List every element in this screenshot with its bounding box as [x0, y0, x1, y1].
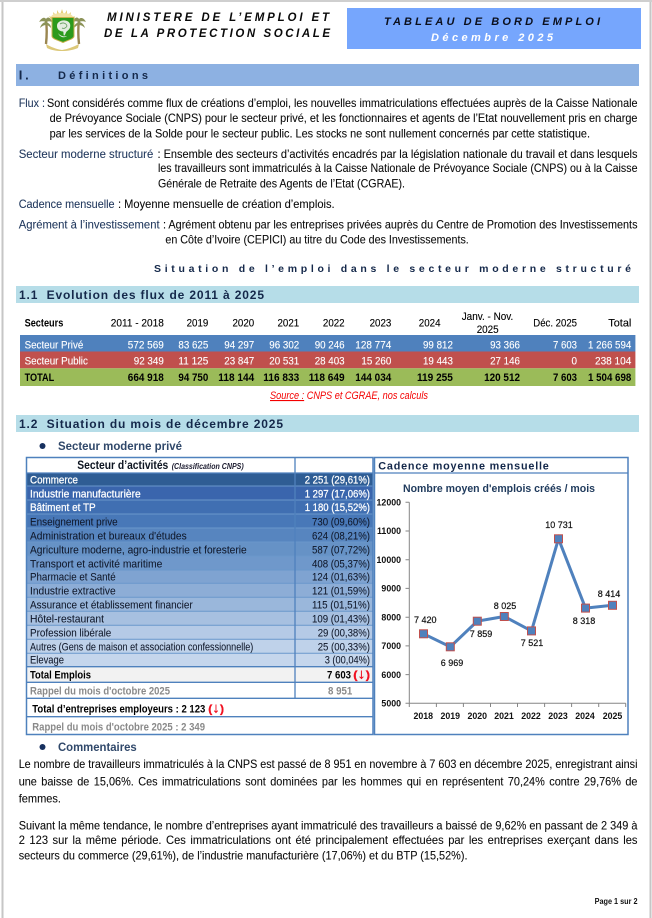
- row: total entreprises: (↓): [208, 700, 224, 716]
- subheading: commentaires: Commentaires: [58, 742, 137, 754]
- y axis labels: 6000: [381, 670, 401, 680]
- row: assurance: Assurance et établissement financier: [30, 599, 193, 611]
- row: industrie manufacturière: 1 297 (17,06%): [305, 488, 370, 500]
- table header: 2024: [419, 317, 441, 329]
- text block: definitions: : Ensemble des secteurs d’activités encadrés par la législation nationale du travail et dans lesquels: [158, 148, 638, 161]
- row: secteur public: 19 443: [423, 355, 453, 367]
- x axis labels: 2021: [494, 711, 514, 721]
- header: dashboard title box: [347, 8, 641, 49]
- data labels: 8 025: [494, 601, 516, 611]
- row: secteur privé: 1 266 594: [588, 339, 631, 351]
- row: agriculture: [30, 544, 370, 556]
- x axis labels: 2024: [575, 711, 595, 721]
- row: secteur privé: 128 774: [355, 339, 391, 351]
- row: assurance: 115 (01,51%): [312, 599, 370, 611]
- row: pharmacie: [30, 571, 370, 583]
- table header: Déc. 2025: [533, 317, 577, 329]
- text block: commentaires: 2 123 sur la même période. Ces immatriculations ont été principalement effectuées par les entreprises exerçant dans les: [19, 834, 638, 847]
- row: total: 118 649: [309, 372, 345, 384]
- row: rappel entreprises: Rappel du mois d'octobre 2025 : 2 349: [32, 721, 205, 733]
- row: agriculture: 587 (07,72%): [312, 544, 370, 556]
- panel heading: Cadence moyenne mensuelle: [378, 460, 549, 472]
- data markers: [420, 535, 616, 651]
- row: secteur privé: 7 603: [553, 339, 577, 351]
- text block: definitions: Flux :: [19, 97, 45, 110]
- data labels: [414, 520, 620, 668]
- table column header: (Classification CNPS): [172, 462, 244, 471]
- row: bâtiment: Bâtiment et TP: [30, 502, 96, 514]
- x axis labels: 2019: [441, 711, 460, 721]
- data labels: 7 859: [470, 629, 492, 639]
- row: secteur privé: 93 366: [490, 339, 520, 351]
- data labels: 7 420: [414, 615, 437, 625]
- row: secteur public: 238 104: [595, 355, 631, 367]
- row: autres: Autres (Gens de maison et association confessionnelle): [30, 641, 253, 653]
- row: secteur privé: 83 625: [178, 339, 208, 351]
- row: bâtiment: 1 180 (15,52%): [305, 502, 370, 514]
- row: administration: 624 (08,21%): [312, 530, 370, 542]
- table header: 2019: [187, 317, 208, 329]
- row: hôtel: Hôtel-restaurant: [30, 613, 104, 625]
- row: total: 7 603: [553, 372, 577, 384]
- y axis labels: 10000: [377, 555, 401, 565]
- y axis labels: 8000: [381, 612, 401, 622]
- row: total emplois: Total Emplois: [30, 669, 91, 681]
- subheading: secteur moderne privé: Secteur moderne privé: [58, 441, 182, 453]
- x axis labels: 2025: [603, 711, 622, 721]
- row: total emplois: (↓): [353, 665, 370, 681]
- table header: 2011 - 2018: [111, 317, 164, 329]
- heading: définitions: [16, 64, 639, 86]
- table header: [25, 311, 631, 336]
- x axis labels: [414, 711, 622, 721]
- row: total emplois: [30, 665, 370, 681]
- row: industrie extractive: 121 (01,59%): [312, 585, 370, 597]
- row: industrie manufacturière: Industrie manufacturière: [30, 488, 141, 500]
- row: transport: 408 (05,37%): [312, 558, 370, 570]
- row: secteur public: 23 847: [224, 355, 254, 367]
- table header: 2025: [477, 324, 499, 336]
- row: total: 94 750: [178, 372, 208, 384]
- row: secteur privé: 90 246: [315, 339, 345, 351]
- row: profession libérale: Profession libérale: [30, 627, 111, 639]
- row: profession libérale: 29 (00,38%): [318, 627, 370, 639]
- text block: definitions: en Côte d’Ivoire (CEPICI) au titre du Code des Investissements.: [165, 234, 469, 247]
- table column header: [77, 460, 244, 472]
- text block: definitions: Agrément à l’investissement: [19, 219, 160, 232]
- text block: definitions: Cadence mensuelle: [19, 198, 115, 211]
- source note: Source : CNPS et CGRAE, nos calculs: [270, 390, 428, 402]
- row: administration: [30, 530, 370, 542]
- heading: 1.2: 1.2 Situation du mois de décembre 2025: [19, 417, 283, 431]
- row: administration: Administration et bureaux d'études: [30, 530, 187, 542]
- data labels: 10 731: [545, 520, 573, 530]
- heading: 1.1: [16, 286, 639, 303]
- panel: cadence moyenne mensuelle: [374, 458, 628, 734]
- heading: 1.2: [16, 415, 639, 432]
- heading: définitions: I.: [19, 68, 29, 82]
- row: industrie extractive: [30, 585, 370, 597]
- row: total: [20, 368, 635, 386]
- heading: 1.1: 1.1 Evolution des flux de 2011 à 2025: [19, 288, 264, 302]
- row: secteur privé: 572 569: [128, 339, 164, 351]
- text block: definitions: Secteur moderne structuré: [19, 148, 153, 161]
- x axis labels: 2020: [468, 711, 487, 721]
- row: enseignement: [30, 516, 370, 528]
- row: hôtel: [30, 613, 370, 625]
- row: rappel octobre: [30, 685, 352, 697]
- row: secteur public: 15 260: [361, 355, 391, 367]
- y axis labels: 7000: [381, 641, 401, 651]
- row: enseignement: 730 (09,60%): [312, 516, 370, 528]
- text block: definitions: : Moyenne mensuelle de création d’emplois.: [118, 198, 335, 211]
- row: total: TOTAL: [25, 372, 55, 384]
- chart title: Nombre moyen d'emplois créés / mois: [403, 483, 595, 495]
- row: secteur public: 0: [572, 355, 577, 367]
- row: total: 120 512: [484, 372, 520, 384]
- text block: definitions: [19, 97, 638, 247]
- row: transport: [30, 558, 370, 570]
- row: secteur privé: Secteur Privé: [25, 339, 83, 351]
- row: secteur public: 92 349: [134, 355, 164, 367]
- y axis labels: 12000: [377, 498, 401, 508]
- row: hôtel: 109 (01,43%): [312, 613, 370, 625]
- header: ministry name: DE LA PROTECTION SOCIALE: [104, 28, 330, 40]
- text block: commentaires: [19, 758, 638, 862]
- row: total: 144 034: [355, 372, 391, 384]
- x axis labels: 2022: [521, 711, 541, 721]
- row fills: [27, 473, 373, 682]
- row: total: 664 918: [128, 372, 164, 384]
- table column header: Secteur d’activités: [77, 460, 168, 472]
- row: assurance: [30, 599, 370, 611]
- row: commerce: 2 251 (29,61%): [305, 474, 370, 486]
- data line: [424, 539, 612, 647]
- row: rappel octobre: Rappel du mois d'octobre 2025: [30, 685, 170, 697]
- line chart: [377, 498, 626, 721]
- text block: definitions: par les services de la Solde pour le secteur public. Les stocks ne sont nullement concernés par cette statistique.: [50, 127, 590, 140]
- row: bâtiment: [30, 502, 370, 514]
- row: secteur public: 27 146: [490, 355, 520, 367]
- row: total: 119 255: [417, 372, 453, 384]
- row: total emplois: 7 603: [327, 669, 351, 681]
- row: total: 116 833: [263, 372, 299, 384]
- icon: coat of arms: [39, 9, 86, 51]
- table header: Total: [608, 317, 631, 329]
- y axis labels: [377, 498, 401, 708]
- table header: Janv. - Nov.: [462, 311, 513, 323]
- table header: Secteurs: [25, 317, 63, 329]
- row: industrie manufacturière: [30, 488, 370, 500]
- y axis labels: 5000: [381, 698, 401, 708]
- page number: Page 1 sur 2: [595, 897, 638, 906]
- row: secteur public: 11 125: [178, 355, 208, 367]
- text block: commentaires: secteurs du commerce (29,61%), de l’industrie manufacturière (17,06%) et du BTP (15,52%).: [19, 849, 467, 862]
- table header: 2023: [370, 317, 391, 329]
- row: commerce: Commerce: [30, 474, 78, 486]
- row: secteur privé: 99 812: [423, 339, 453, 351]
- heading: situation de l'emploi: Situation de l’emploi dans le secteur moderne structuré: [154, 263, 631, 275]
- row: agriculture: Agriculture moderne, agro-industrie et foresterie: [30, 544, 247, 556]
- data labels: 6 969: [441, 658, 463, 668]
- header: dashboard title box: Décembre 2025: [431, 32, 554, 44]
- table header: 2021: [278, 317, 299, 329]
- text block: definitions: Générale de Retraite des Agents de l’Etat (CGRAE).: [158, 177, 405, 190]
- row: autres: 25 (00,33%): [318, 641, 370, 653]
- row: transport: Transport et activité maritime: [30, 558, 162, 570]
- data labels: 7 521: [521, 638, 543, 648]
- table: flux 2011-2025: [20, 311, 635, 386]
- row: enseignement: Enseignement prive: [30, 516, 118, 528]
- row: secteur privé: [20, 335, 635, 352]
- row: pharmacie: 124 (01,63%): [312, 571, 370, 583]
- row: industrie extractive: Industrie extractive: [30, 585, 116, 597]
- row: rappel octobre: 8 951: [328, 685, 352, 697]
- data labels: 8 318: [573, 616, 595, 626]
- row: secteur privé: 94 297: [224, 339, 254, 351]
- row: total: 118 144: [218, 372, 254, 384]
- y axis labels: 11000: [377, 526, 401, 536]
- row: elevage: Elevage: [30, 655, 64, 667]
- row: secteur public: 28 403: [315, 355, 345, 367]
- row: total entreprises: Total d’entreprises employeurs : 2 123: [32, 704, 205, 716]
- row: commerce: [30, 474, 370, 486]
- header: ministry name: [104, 12, 330, 40]
- x axis labels: 2018: [414, 711, 433, 721]
- header: ministry name: MINISTERE DE L’EMPLOI ET: [107, 12, 330, 24]
- header: dashboard title box: TABLEAU DE BORD EMPLOI: [384, 16, 601, 28]
- row: total: 1 504 698: [588, 372, 631, 384]
- data labels: 8 414: [598, 589, 620, 599]
- row: elevage: 3 (00,04%): [325, 655, 370, 667]
- y axis labels: 9000: [381, 584, 401, 594]
- row: elevage: [30, 655, 370, 667]
- row: pharmacie: Pharmacie et Santé: [30, 571, 116, 583]
- heading: définitions: Définitions: [58, 70, 148, 82]
- table: secteurs d'activités: [26, 457, 373, 734]
- row: secteur public: 20 531: [269, 355, 299, 367]
- table header: 2022: [323, 317, 345, 329]
- row: secteur public: [20, 352, 635, 368]
- table header: 2020: [232, 317, 254, 329]
- row: secteur public: Secteur Public: [25, 355, 89, 367]
- row: secteur privé: 96 302: [269, 339, 299, 351]
- x axis labels: 2023: [548, 711, 568, 721]
- text block: commentaires: femmes.: [19, 792, 61, 805]
- row: profession libérale: [30, 627, 370, 639]
